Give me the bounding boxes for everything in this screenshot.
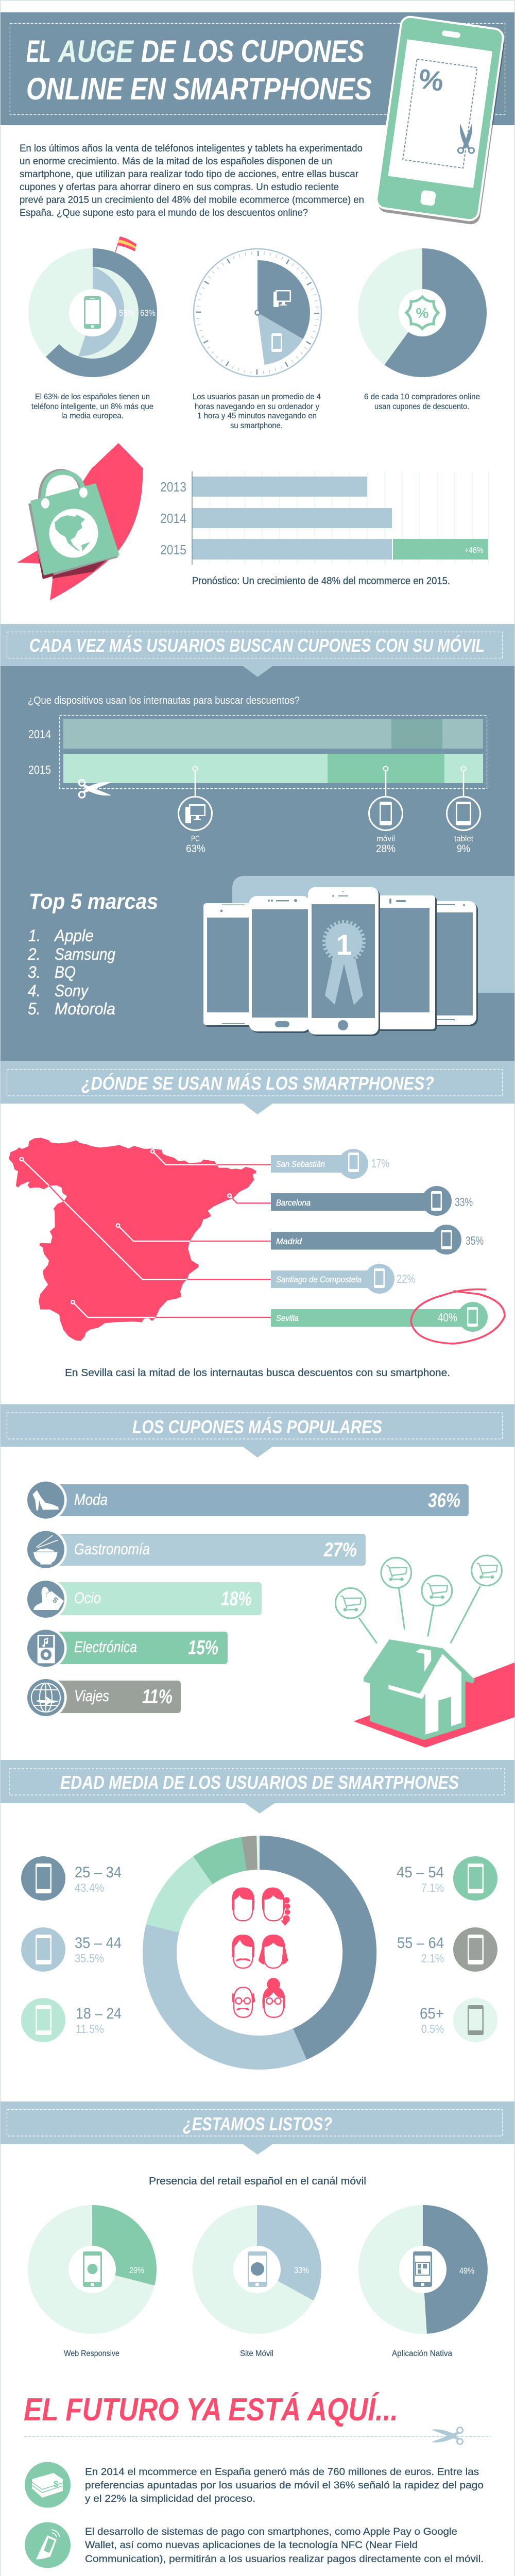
subheading: retail presence: Presencia del retail español en el canál móvil [149, 2176, 366, 2187]
chart: mcommerce growth bars: 2014 [160, 511, 186, 526]
caption: smartphone ownership: la media europea. [61, 412, 124, 420]
chart: mcommerce growth bars: +48% [464, 546, 484, 555]
intro paragraph: España. ¿Que supone esto para el mundo de los descuentos online? [20, 207, 308, 218]
illustration: house with shopping cart balloons [335, 1555, 515, 1748]
cut line with scissors [24, 2428, 491, 2444]
chart: time clock [194, 249, 321, 377]
bar: Viajes: Viajes [74, 1687, 109, 1705]
list: top 5 brands: Apple [54, 926, 94, 945]
legend: 65+ [420, 1998, 497, 2042]
caption: coupon buyers: usan cupones de descuento. [374, 402, 469, 411]
list: top 5 brands: BQ [55, 963, 76, 981]
chart: device stacked bars: 2014 [28, 727, 51, 741]
caption: smartphone ownership: teléfono inteligente, un 8% más que [31, 402, 153, 411]
legend: 45-54: 45 – 54 [397, 1864, 444, 1881]
bar: Electrónica [52, 1632, 228, 1664]
chart: smartphone ownership pie: 63% [140, 308, 156, 318]
map: spain with city connectors [9, 1138, 271, 1341]
marker: tablet share [447, 767, 480, 855]
text: revenue: preferencias apuntadas por los usuarios de móvil el 36% señaló la rapidez del pago [85, 2480, 484, 2491]
legend: 35-44 [21, 1927, 122, 1972]
chart: age donut [143, 1836, 376, 2070]
legend: 55-64 [397, 1927, 497, 1972]
subheading: devices question: ¿Que dispositivos usan los internautas para buscar descuentos? [28, 695, 300, 706]
legend: 65+: 65+ [420, 2005, 444, 2022]
bar: Ocio: 18% [221, 1588, 252, 1610]
bar: Barcelona: Barcelona [276, 1198, 311, 1208]
title: ONLINE EN SMARTPHONES [26, 72, 372, 106]
heading: el futuro ya esta aqui: EL FUTURO YA ESTÁ AQUÍ... [24, 2392, 398, 2428]
chart: web responsive pie: Web Responsive [64, 2349, 119, 2358]
chart: web responsive pie [28, 2205, 157, 2358]
text: mobile payment: Communication), permitirán a los usuarios realizar pagos directamente con el móvil. [85, 2553, 484, 2565]
text: revenue: y el 22% la simplicidad del proceso. [85, 2493, 255, 2504]
list: top 5 brands: 1. [28, 926, 41, 945]
caption: coupon buyers: 6 de cada 10 compradores online [364, 393, 480, 401]
bar: Electrónica: Electrónica [74, 1638, 137, 1656]
list: top 5 brands: Sony [55, 981, 89, 1000]
icon: money stack: $ [54, 2479, 59, 2489]
icon: scissors on dashed box [79, 780, 112, 798]
list: top 5 brands: 2. [27, 945, 41, 963]
heading band: cupones populares: LOS CUPONES MÁS POPULARES [132, 1416, 382, 1437]
text: mobile payment [85, 2526, 484, 2565]
intro paragraph: En los últimos años la venta de teléfonos inteligentes y tablets ha experimentado [20, 143, 363, 154]
icon: big phone with coupon [375, 15, 506, 226]
list: top 5 brands: Motorola [55, 999, 115, 1018]
chart: native app pie: Aplicación Nativa [392, 2349, 452, 2358]
chart: coupon buyers pie [358, 248, 487, 377]
legend: 35-44: 35 – 44 [75, 1935, 122, 1952]
icon: shopping bag with globe and ribbon [17, 443, 143, 600]
legend: 18-24 [21, 1998, 122, 2042]
bar: Sevilla highlighted: Sevilla [276, 1313, 299, 1323]
heading band: donde se usan: ¿DÓNDE SE USAN MÁS LOS SMARTPHONES? [81, 1073, 434, 1094]
marker: mobile share: 28% [376, 843, 396, 855]
title: AUGE [57, 34, 134, 69]
heading band: cada vez mas usuarios [0, 624, 515, 677]
header band [0, 12, 515, 125]
heading: top 5: Top 5 marcas [29, 889, 158, 914]
legend: 65+: 0.5% [421, 2022, 444, 2036]
bar: San Sebastián: 17% [371, 1157, 389, 1170]
bar: San Sebastián: San Sebastián [276, 1159, 325, 1169]
intro paragraph: smartphone, que utilizan para realizar todo tipo de acciones, entre ellas buscar [20, 168, 358, 180]
icon: spanish flag [115, 236, 136, 252]
heading band: estamos listos [0, 2102, 515, 2155]
list: top 5 brands: 5. [28, 999, 41, 1018]
legend: 45-54 [397, 1856, 497, 1901]
text: mobile payment: Wallet, así como nuevas aplicaciones de la tecnología NFC (Near Field [85, 2539, 418, 2551]
marker: mobile share: móvil [376, 835, 395, 843]
legend: 25-34: 43.4% [75, 1881, 104, 1894]
legend: 18-24: 11.5% [76, 2022, 104, 2036]
bar: Sevilla highlighted: 40% [438, 1311, 457, 1324]
legend: 45-54: 7.1% [421, 1881, 444, 1894]
title [26, 34, 372, 106]
heading band: cupones populares [0, 1404, 515, 1458]
chart: coupon buyers pie: % [416, 305, 429, 321]
icons: coupon categories: $ [51, 1596, 60, 1605]
marker: PC share: PC [191, 835, 200, 843]
legend: 35-44: 35.5% [75, 1952, 104, 1965]
icon: hand paying with phone [25, 2522, 71, 2568]
caption: time online [193, 393, 321, 430]
chart: smartphone ownership pie: 55% [119, 308, 134, 318]
bar: Sevilla highlighted [271, 1289, 505, 1344]
chart: device stacked bars [28, 715, 487, 788]
marker: PC share: 63% [186, 843, 205, 855]
caption: smartphone ownership: El 63% de los españoles tienen un [35, 393, 150, 401]
caption: time online: su smartphone. [230, 421, 283, 430]
caption: time online: Los usuarios pasan un promedio de 4 [193, 393, 321, 401]
bar: Ocio [52, 1582, 262, 1615]
heading band: edad media [0, 1760, 515, 1814]
intro paragraph: prevé para 2015 un crecimiento del 48% del mobile ecommerce (mcommerce) en [20, 194, 364, 206]
legend: 25-34 [21, 1856, 122, 1901]
chart: smartphone ownership pie [28, 248, 157, 377]
icon: money stack [25, 2462, 71, 2508]
chart: mcommerce growth bars: 2015 [160, 542, 186, 557]
chart: mcommerce growth bars: 2013 [160, 479, 186, 495]
bar: Moda: 36% [428, 1489, 460, 1512]
caption: coupon buyers [364, 393, 480, 411]
bar: Madrid: 35% [466, 1234, 484, 1247]
panel: devices background [0, 666, 515, 1061]
text: revenue: En 2014 el mcommerce en España generó más de 760 millones de euros. Entre las [85, 2466, 479, 2478]
icon: big phone with coupon: % [417, 63, 445, 97]
list: top 5 brands: Samsung [55, 945, 115, 963]
list: top 5 brands [27, 926, 115, 1018]
chart: native app pie: 49% [459, 2266, 474, 2276]
bar: Santiago de Compostela: 22% [397, 1272, 416, 1285]
illustration: five phones with rosette: 1 [336, 928, 352, 961]
legend: 55-64: 2.1% [421, 1952, 444, 1965]
bar: Madrid: Madrid [276, 1236, 302, 1246]
bar: Madrid [271, 1225, 484, 1255]
text: mobile payment: El desarrollo de sistemas de pago con smartphones, como Apple Pay o Google [85, 2526, 457, 2537]
chart: mobile site pie: 33% [294, 2265, 309, 2275]
text: forecast: Pronóstico: Un crecimiento de 48% del mcommerce en 2015. [192, 575, 450, 587]
chart: mcommerce growth bars [160, 471, 489, 565]
chart: native app pie [358, 2205, 488, 2358]
legend: 25-34: 25 – 34 [75, 1864, 122, 1881]
bar: Barcelona [271, 1186, 473, 1216]
bar: Santiago de Compostela [271, 1264, 416, 1294]
text: Sevilla statement: En Sevilla casi la mitad de los internautas busca descuentos con su smartphone. [65, 1367, 450, 1379]
chart: mobile site pie: Site Móvil [240, 2349, 273, 2358]
bar: Electrónica: 15% [188, 1637, 218, 1659]
marker: mobile share [369, 767, 403, 855]
bar: Moda [52, 1484, 469, 1516]
caption: time online: 1 hora y 45 minutos navegando en [197, 412, 317, 420]
text: revenue [85, 2466, 484, 2504]
illustration: five phones with rosette [203, 876, 515, 1036]
intro paragraph: un enorme crecimiento. Más de la mitad de los españoles disponen de un [20, 156, 332, 167]
bar: Santiago de Compostela: Santiago de Compostela [276, 1275, 362, 1284]
legend: 18-24: 18 – 24 [76, 2005, 122, 2022]
chart: mobile site pie [193, 2205, 321, 2358]
bar: Gastronomía: 27% [323, 1539, 357, 1561]
heading band: donde se usan [0, 1061, 515, 1114]
marker: tablet share: 9% [457, 843, 470, 855]
chart: device stacked bars: 2015 [28, 763, 51, 776]
marker: tablet share: tablet [454, 835, 474, 843]
intro paragraph: cupones y ofertas para ahorrar dinero en sus compras. Un estudio reciente [20, 181, 339, 193]
bar: Viajes [52, 1681, 181, 1713]
intro paragraph [20, 143, 364, 218]
icons: six faces [232, 1887, 290, 2018]
bar: Gastronomía [52, 1534, 366, 1566]
legend: 55-64: 55 – 64 [397, 1935, 444, 1952]
heading band: estamos listos: ¿ESTAMOS LISTOS? [183, 2113, 332, 2134]
bar: Gastronomía: Gastronomía [74, 1540, 150, 1558]
bar: San Sebastián [271, 1149, 389, 1179]
caption: time online: horas navegando en su ordenador y [195, 402, 319, 411]
title: EL [26, 34, 51, 69]
bar: Barcelona: 33% [455, 1195, 473, 1209]
caption: smartphone ownership [31, 393, 153, 420]
list: top 5 brands: 3. [28, 963, 41, 981]
marker: PC share [178, 767, 212, 855]
icons: coupon categories [25, 1479, 67, 1719]
title: DE LOS CUPONES [141, 34, 364, 69]
list: top 5 brands: 4. [28, 981, 41, 1000]
bar: Moda: Moda [74, 1490, 108, 1509]
chart: web responsive pie: 29% [129, 2265, 144, 2275]
bar: Ocio: Ocio [74, 1589, 101, 1607]
bar: Viajes: 11% [142, 1686, 173, 1708]
